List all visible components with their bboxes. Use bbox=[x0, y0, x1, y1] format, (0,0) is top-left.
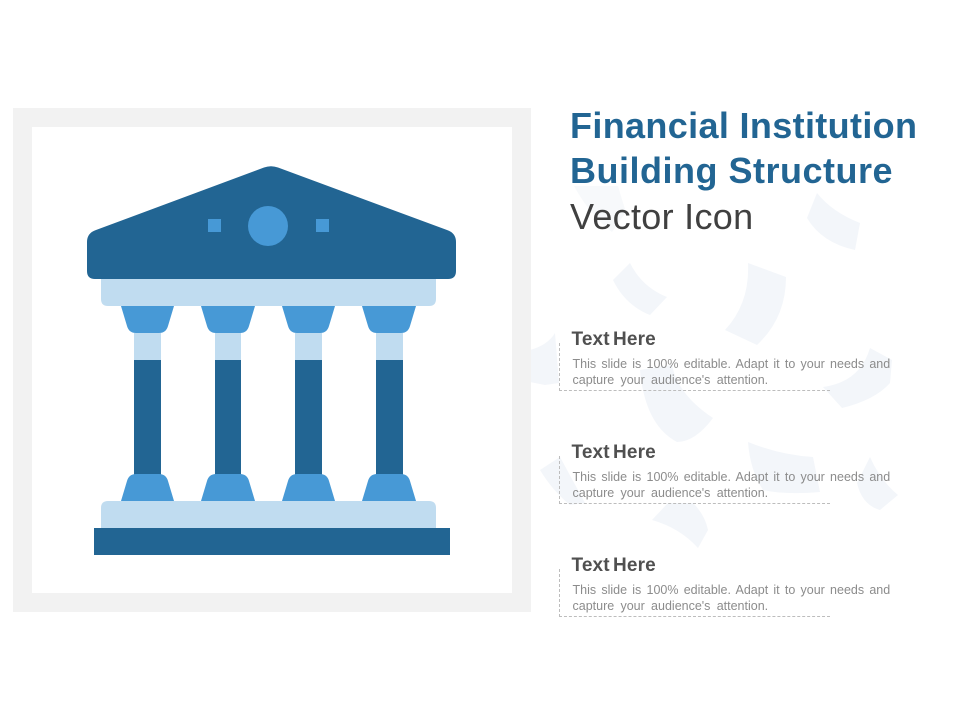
roof medallion bbox=[208, 206, 329, 246]
text block 2: This slide is 100% editable. Adapt it to your needs and bbox=[572, 470, 890, 484]
entablature band bbox=[101, 279, 436, 306]
icon: bank building bbox=[87, 166, 456, 555]
text block 1: This slide is 100% editable. Adapt it to your needs and bbox=[572, 357, 890, 371]
text block 3 bbox=[559, 555, 890, 617]
text block 2: capture your audience's attention. bbox=[572, 486, 768, 500]
column 3 bbox=[282, 306, 335, 501]
base step bbox=[101, 501, 436, 528]
column 2 bbox=[201, 306, 255, 501]
text block 3: capture your audience's attention. bbox=[572, 599, 768, 613]
text block 1: Text Here bbox=[572, 329, 656, 350]
roof pediment bbox=[87, 166, 456, 279]
base plinth bbox=[94, 528, 450, 555]
text block 2: Text Here bbox=[572, 442, 656, 463]
title: Vector Icon bbox=[570, 196, 753, 237]
panel: icon frame bbox=[13, 108, 531, 612]
title bbox=[570, 105, 917, 237]
text block 1: capture your audience's attention. bbox=[572, 373, 768, 387]
column 4 bbox=[362, 306, 416, 501]
text block 2 bbox=[559, 442, 890, 504]
column 1 bbox=[121, 306, 174, 501]
text block 3: Text Here bbox=[572, 555, 656, 576]
title: Building Structure bbox=[570, 150, 893, 191]
title: Financial Institution bbox=[570, 105, 917, 146]
text block 1 bbox=[559, 329, 890, 391]
text block 3: This slide is 100% editable. Adapt it to your needs and bbox=[572, 583, 890, 597]
